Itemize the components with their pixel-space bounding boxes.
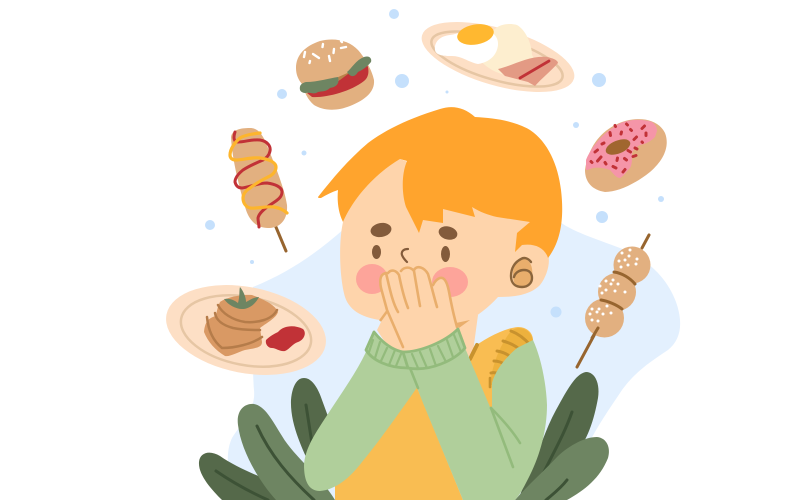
body — [231, 128, 287, 228]
ketchup puddle — [266, 326, 305, 351]
ear swirl — [511, 258, 532, 287]
left sleeve — [304, 352, 418, 491]
ear — [498, 245, 549, 297]
burger bun — [296, 39, 374, 110]
burger lettuce — [300, 56, 371, 93]
burger sauce — [307, 64, 368, 97]
cutlet lines — [207, 305, 277, 348]
hand — [380, 267, 470, 358]
donut — [585, 119, 667, 192]
face — [340, 159, 535, 330]
mashed potato — [477, 24, 540, 76]
plate ring — [175, 285, 317, 377]
neck — [377, 300, 478, 365]
eyebrows — [369, 221, 459, 242]
plate — [158, 272, 334, 388]
burger sesame — [304, 41, 346, 63]
right leaves — [515, 372, 609, 500]
skewer stick — [577, 235, 649, 367]
nose — [402, 249, 408, 262]
eyes — [372, 245, 450, 262]
dango seeds — [588, 248, 638, 322]
donut hole — [604, 136, 632, 158]
donut icing — [586, 120, 657, 178]
plate ring — [426, 20, 568, 98]
right shoulder sleeve — [492, 340, 547, 500]
egg white — [435, 27, 498, 64]
dango bands — [601, 272, 635, 309]
background blue blob — [228, 222, 680, 500]
cutlets — [204, 295, 278, 356]
donut dough — [585, 119, 667, 192]
cheeks — [356, 264, 468, 297]
right sleeve — [403, 348, 515, 500]
sweater cuffs — [366, 329, 465, 369]
mustard — [230, 133, 287, 213]
sleeve crease lines — [410, 368, 520, 467]
burger — [296, 39, 374, 110]
shoulder shade — [490, 328, 533, 385]
ketchup — [234, 132, 282, 227]
vest knit lines — [470, 331, 530, 387]
bacon — [498, 57, 558, 86]
shirt body — [335, 385, 463, 500]
stick front — [592, 328, 598, 338]
garnish leaves — [224, 287, 259, 309]
left leaves — [199, 378, 335, 500]
plate — [414, 8, 582, 106]
egg and bacon plate — [414, 8, 582, 106]
cuff ribs — [369, 335, 461, 368]
shirt shoulder — [470, 327, 533, 412]
donut sprinkles — [591, 124, 646, 172]
chin outline shadow — [380, 310, 388, 321]
left plate with cutlets — [158, 272, 334, 388]
ear inner — [513, 259, 532, 287]
bacon stripe — [520, 61, 549, 78]
dango balls — [585, 246, 650, 338]
corn dog — [230, 128, 287, 251]
burger patty — [336, 71, 352, 81]
hair — [318, 107, 562, 258]
egg yolk — [456, 21, 495, 48]
floating dots — [205, 9, 664, 318]
stick — [273, 220, 286, 251]
dango skewer — [577, 235, 650, 367]
